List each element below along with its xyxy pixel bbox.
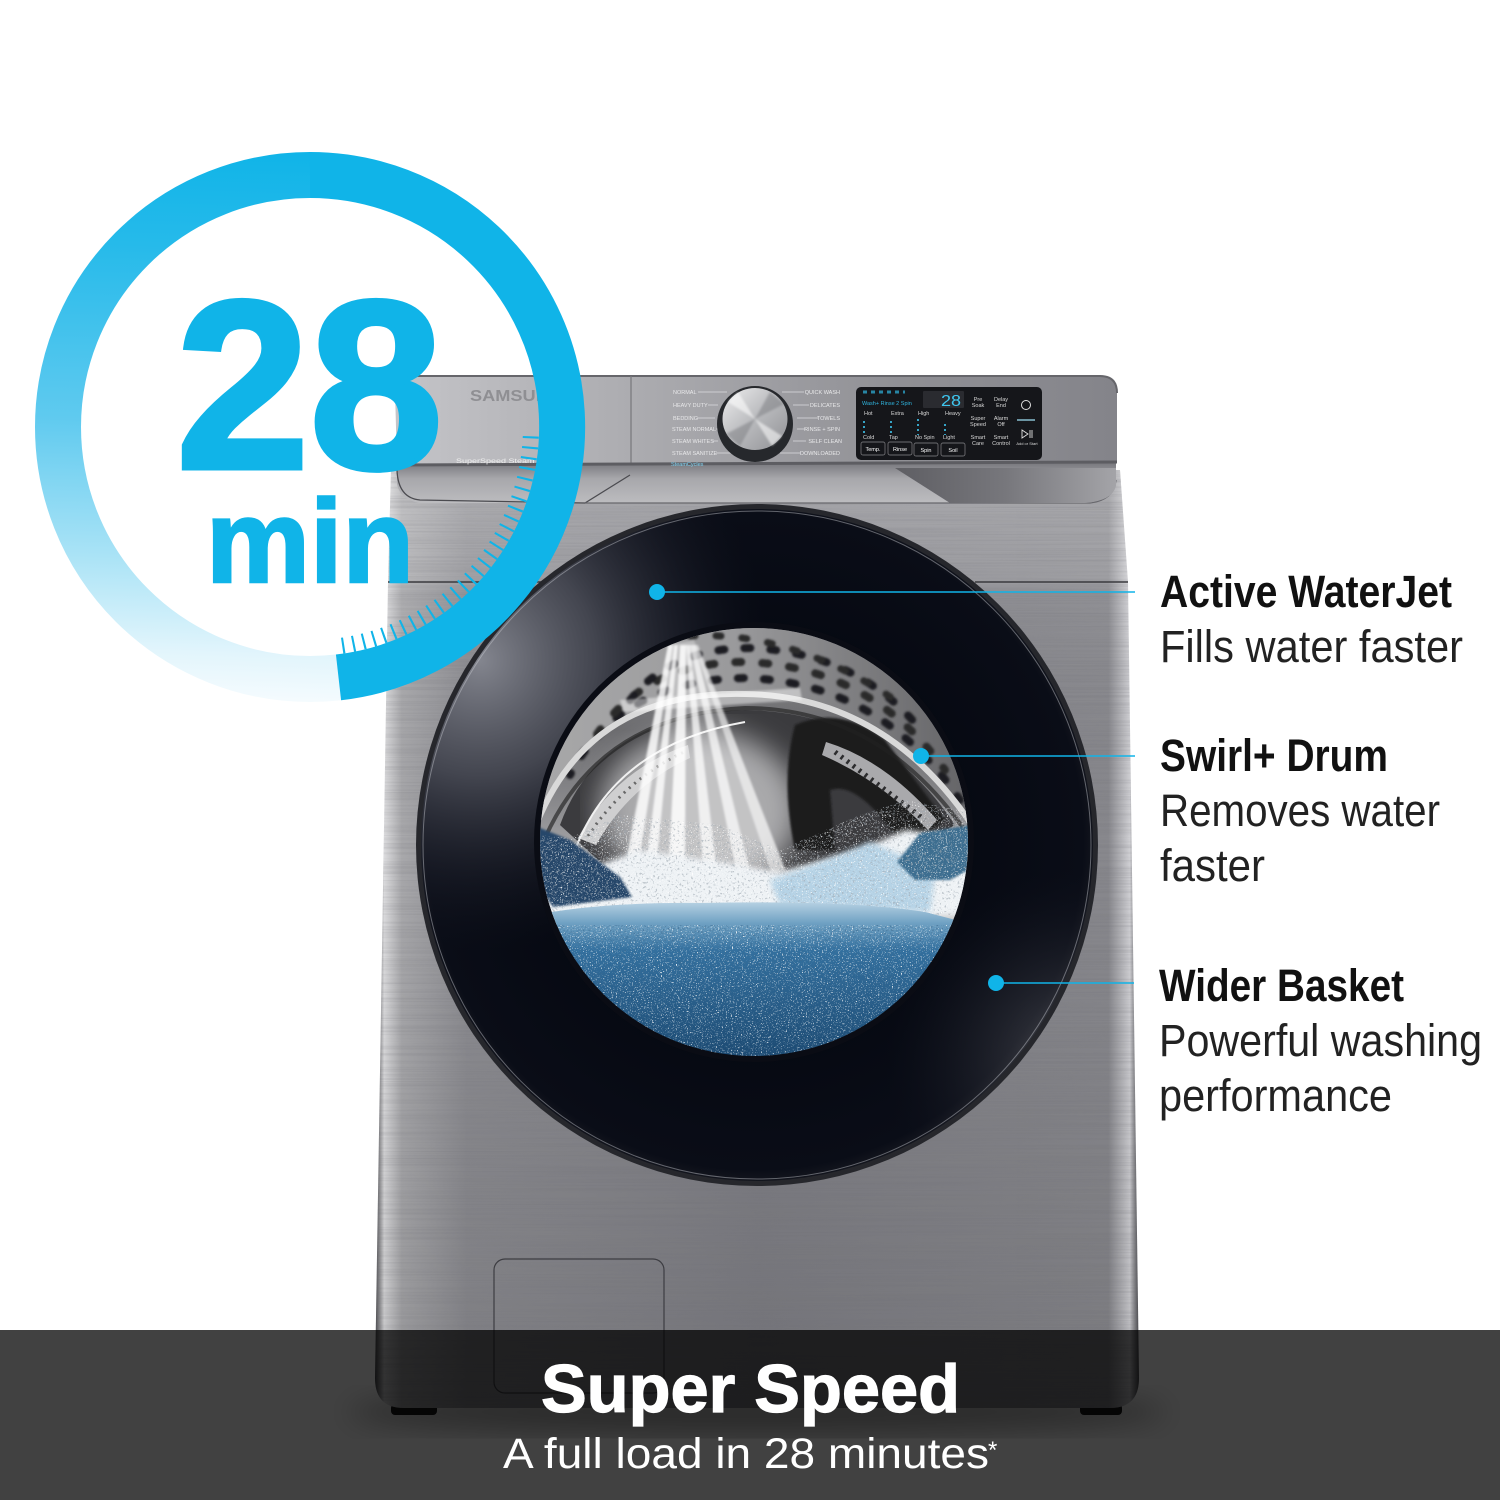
cycle labels: BEDDING (673, 416, 698, 422)
control display: Off (997, 422, 1005, 428)
cycle labels: STEAM NORMAL (672, 427, 716, 433)
bottom banner (0, 1330, 1500, 1500)
model name: SuperSpeed Steam Smart (456, 459, 561, 465)
cycle labels: TOWELS (817, 416, 840, 422)
callout: active waterjet: Active WaterJet (1160, 566, 1452, 617)
floor shadow (347, 1390, 1167, 1434)
cycle labels: SELF CLEAN (808, 439, 842, 445)
control display: Rinse (893, 447, 907, 453)
cycle labels: RINSE + SPIN (804, 427, 840, 433)
control display: Control (992, 441, 1010, 447)
water sparkle (558, 925, 951, 1056)
cycle labels: DELICATES (810, 403, 840, 409)
drum rim (536, 694, 972, 850)
cycle labels: STEAM WHITES (672, 439, 714, 445)
control display: Tap (889, 435, 898, 441)
control display: Alarm (994, 416, 1009, 422)
right paddle (788, 718, 945, 850)
washing machine (375, 376, 1140, 1415)
door ring (416, 504, 1098, 1186)
control display: Heavy (945, 411, 961, 417)
denim right (897, 825, 972, 880)
drawer band (397, 462, 1116, 503)
control display: Smart (994, 435, 1009, 441)
control display (856, 387, 1042, 460)
callout: wider basket (988, 960, 1482, 1121)
cycle labels: DOWNLOADED (800, 451, 840, 457)
control display: Smart (971, 435, 986, 441)
control display: Light (943, 435, 955, 441)
control display: Cold (863, 435, 874, 441)
cycle labels: SteamCycles (671, 462, 704, 468)
cycle labels: STEAM SANITIZE (672, 451, 718, 457)
spray sparkle (535, 795, 971, 915)
control display: Temp. (866, 447, 881, 453)
selector dial (717, 386, 793, 462)
cabinet body (375, 470, 1140, 1410)
control display: Hot (864, 411, 873, 417)
callout: swirl drum (913, 730, 1440, 891)
drum metal (535, 625, 971, 925)
access panel (494, 1259, 664, 1393)
cycle labels: NORMAL (673, 390, 697, 396)
feet (391, 1404, 1122, 1415)
callout: swirl drum: faster (1160, 840, 1265, 891)
water jet beams (620, 640, 802, 880)
callout: swirl drum: Removes water (1160, 785, 1440, 836)
control display: Wash+ Rinse 2 Spin (862, 401, 912, 407)
control display: End (996, 403, 1006, 409)
brand name: SAMSUNG (470, 388, 563, 405)
control display: No Spin (915, 435, 935, 441)
callout: active waterjet (649, 566, 1463, 672)
control display: Pre (974, 397, 982, 403)
foam mound (770, 842, 935, 912)
perforated drum (542, 628, 966, 811)
control display: Soak (972, 403, 985, 409)
control display: Soil (948, 448, 958, 454)
denim left (535, 826, 632, 907)
left paddle (578, 745, 690, 845)
callout: active waterjet: Fills water faster (1160, 621, 1463, 672)
cycle labels (671, 390, 842, 468)
timer number: 28 (176, 251, 443, 519)
banner subtitle: A full load in 28 minutes (503, 1430, 989, 1478)
cycle labels: QUICK WASH (805, 390, 840, 396)
control display: Delay (994, 397, 1008, 403)
banner title: Super Speed (541, 1351, 960, 1427)
cycle labels: HEAVY DUTY (673, 403, 708, 409)
timer ring (58, 175, 562, 679)
foam spray (540, 830, 975, 925)
control display: Care (972, 441, 984, 447)
control display: Extra (891, 411, 905, 417)
drum view (535, 625, 975, 1062)
control panel top (395, 376, 1117, 465)
callout: wider basket: Wider Basket (1159, 960, 1404, 1011)
digital time: 28 (941, 393, 961, 410)
rear drum shadow (560, 710, 955, 880)
control display: High (918, 411, 929, 417)
control display: Spin (920, 448, 932, 454)
control display: Speed (970, 422, 986, 428)
callout: swirl drum: Swirl+ Drum (1160, 730, 1388, 781)
timer unit: min (206, 476, 414, 608)
water (552, 902, 954, 1056)
control display: Super (971, 416, 986, 422)
control display: Add or Start (1016, 441, 1039, 446)
timer ticks (334, 436, 531, 647)
footnote mark: * (988, 1437, 997, 1464)
callout: wider basket: performance (1159, 1070, 1392, 1121)
